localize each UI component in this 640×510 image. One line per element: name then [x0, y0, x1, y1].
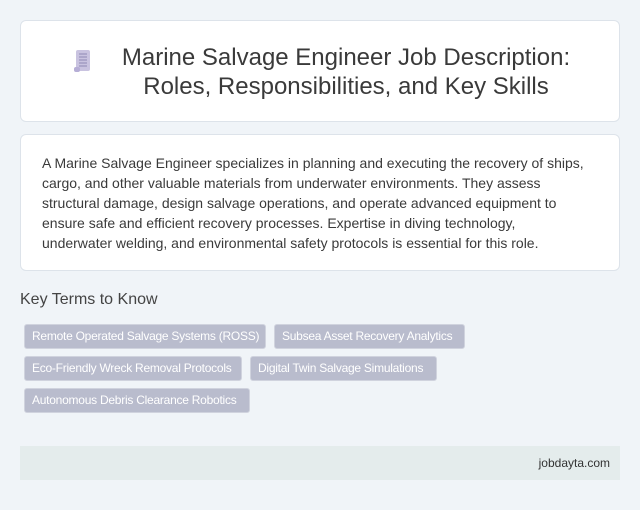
header card [20, 20, 620, 122]
tag 1: Remote Operated Salvage Systems (ROSS) [32, 329, 259, 343]
footer [20, 446, 620, 480]
tag 4 [250, 356, 437, 381]
tag 2: Subsea Asset Recovery Analytics [282, 329, 452, 343]
tag 5 [24, 388, 250, 413]
icon: document [74, 50, 90, 72]
title: Marine Salvage Engineer Job Description: Roles, Responsibilities, and Key Skills [122, 44, 570, 100]
footer: jobdayta.com [539, 456, 610, 470]
description card: A Marine Salvage Engineer specializes in planning and executing the recovery of ships, cargo, and other valuable materials from underwater environments. They assess structural damage, design salvage operations, and operate advanced equipment to ensure safe and efficient recovery processes. Expertise in diving technology, underwater welding, and environmental safety protocols is essential for this role. [42, 155, 584, 251]
tag 1 [24, 324, 266, 349]
tag 5: Autonomous Debris Clearance Robotics [32, 393, 236, 407]
tag 4: Digital Twin Salvage Simulations [258, 361, 423, 375]
heading: key terms: Key Terms to Know [20, 291, 158, 308]
tag 3: Eco-Friendly Wreck Removal Protocols [32, 361, 232, 375]
tag 3 [24, 356, 242, 381]
tag 2 [274, 324, 465, 349]
description card [20, 134, 620, 271]
